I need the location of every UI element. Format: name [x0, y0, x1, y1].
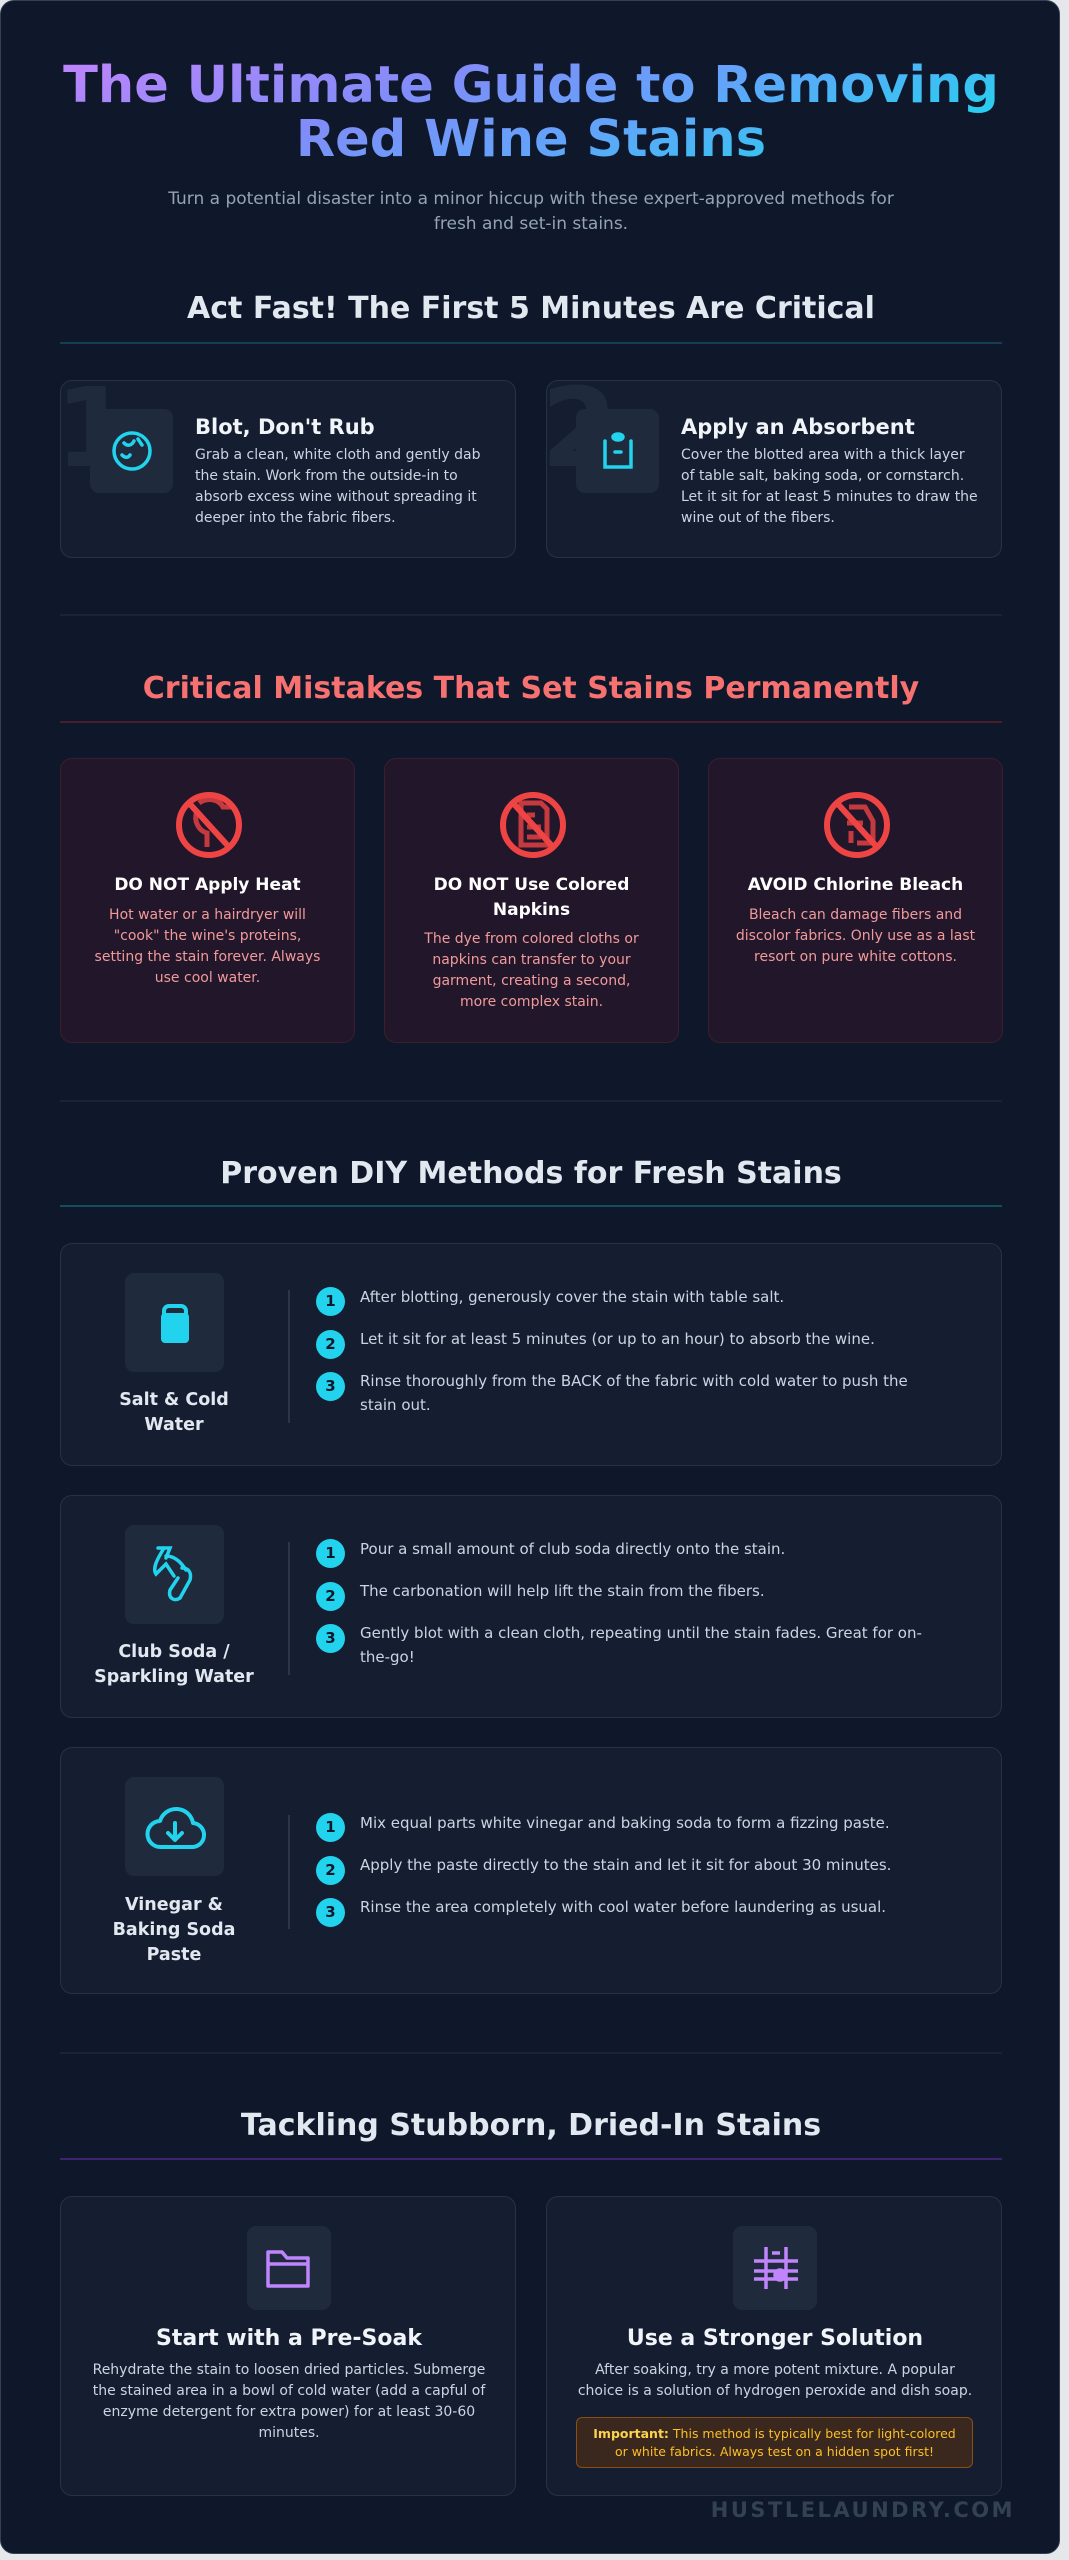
steps — [316, 1287, 908, 1414]
steps: Apply the paste directly to the stain and let it sit for about 30 minutes. — [360, 1856, 891, 1874]
heading: act fast: Act Fast! The First 5 Minutes Are Critical — [187, 291, 875, 326]
callout: important — [576, 2417, 973, 2468]
method card: vinegar — [60, 1747, 1002, 1994]
steps — [316, 1813, 891, 1927]
title: The Ultimate Guide to Removing — [63, 56, 999, 115]
heading: Start with a Pre-Soak — [156, 2326, 422, 2351]
title — [63, 56, 999, 169]
card: bleach — [708, 758, 1003, 1043]
label: Vinegar & — [125, 1895, 223, 1915]
heading: Apply an Absorbent — [681, 415, 915, 439]
steps: Rinse the area completely with cool water before laundering as usual. — [360, 1898, 886, 1916]
icon: blot — [90, 409, 173, 493]
card: blot — [60, 380, 516, 558]
heading: AVOID Chlorine Bleach — [748, 875, 963, 895]
icon: mix — [733, 2226, 817, 2310]
steps: The carbonation will help lift the stain from the fibers. — [360, 1582, 765, 1600]
label — [119, 1390, 229, 1435]
text: Bleach can damage fibers and discolor fabrics. Only use as a last resort on pure white cottons. — [736, 907, 975, 965]
label: Salt & Cold — [119, 1390, 229, 1410]
heading: stubborn: Tackling Stubborn, Dried-In Stains — [241, 2108, 821, 2143]
text: After soaking, try a more potent mixture. A popular choice is a solution of hydrogen peroxide and dish soap. — [578, 2362, 972, 2399]
steps: 3 — [325, 1377, 336, 1395]
icon: container — [576, 409, 659, 493]
steps: Rinse thoroughly from the BACK of the fabric with cold water to push the stain out. — [360, 1372, 908, 1414]
steps: 1 — [325, 1292, 336, 1310]
heading: DO NOT Use Colored Napkins — [434, 875, 629, 920]
label: Club Soda / — [118, 1642, 230, 1662]
steps: 3 — [325, 1903, 336, 1921]
callout: important: or white fabrics. Always test on a hidden spot first! — [615, 2444, 934, 2459]
card: stronger solution — [546, 2196, 1002, 2496]
label — [94, 1642, 254, 1687]
heading: Use a Stronger Solution — [627, 2326, 923, 2351]
title: Red Wine Stains — [296, 110, 766, 169]
card: pre-soak — [60, 2196, 516, 2496]
text: Grab a clean, white cloth and gently dab the stain. Work from the outside-in to absorb excess wine without spreading it deeper into the fabric fibers. — [195, 447, 480, 526]
label: Water — [144, 1415, 204, 1435]
method card: club soda — [60, 1495, 1002, 1718]
steps: 2 — [325, 1861, 336, 1879]
icon: no bleach — [824, 792, 890, 858]
method card: salt — [60, 1243, 1002, 1466]
label — [113, 1895, 235, 1965]
number 1: 1 — [55, 364, 132, 492]
card: heat — [60, 758, 355, 1043]
card: absorbent — [546, 380, 1002, 558]
steps: After blotting, generously cover the stain with table salt. — [360, 1288, 784, 1306]
steps: 3 — [325, 1629, 336, 1647]
steps: 1 — [325, 1544, 336, 1562]
heading: mistakes: Critical Mistakes That Set Stains Permanently — [143, 671, 919, 706]
label: Paste — [147, 1945, 201, 1965]
heading: DO NOT Apply Heat — [114, 875, 301, 895]
icon: folder — [247, 2226, 331, 2310]
steps: Mix equal parts white vinegar and baking soda to form a fizzing paste. — [360, 1814, 890, 1832]
icon: salt — [125, 1273, 224, 1372]
steps: Pour a small amount of club soda directly onto the stain. — [360, 1540, 785, 1558]
subtitle: Turn a potential disaster into a minor hiccup with these expert-approved methods for fresh and set-in stains. — [168, 189, 894, 234]
heading: DIY methods: Proven DIY Methods for Fresh Stains — [220, 1156, 842, 1191]
number 2: 2 — [541, 364, 618, 492]
text: The dye from colored cloths or napkins can transfer to your garment, creating a second, more complex stain. — [424, 931, 639, 1010]
icon: no napkins — [500, 792, 566, 858]
heading: Blot, Don't Rub — [195, 415, 375, 439]
text: Rehydrate the stain to loosen dried particles. Submerge the stained area in a bowl of cold water (add a capful of enzyme detergent for extra power) for at least 30-60 minutes. — [93, 2362, 485, 2441]
steps — [316, 1539, 922, 1666]
label: Sparkling Water — [94, 1667, 254, 1687]
footer brand: HUSTLELAUNDRY.COM — [711, 2498, 1015, 2522]
card: napkins — [384, 758, 679, 1043]
steps: 2 — [325, 1587, 336, 1605]
callout: important: Important: This method is typically best for light-colored — [593, 2426, 956, 2441]
steps: 2 — [325, 1335, 336, 1353]
steps: Gently blot with a clean cloth, repeating until the stain fades. Great for on-the-go! — [360, 1624, 922, 1666]
steps: Let it sit for at least 5 minutes (or up to an hour) to absorb the wine. — [360, 1330, 875, 1348]
icon: cloud download — [125, 1777, 224, 1876]
text: Hot water or a hairdryer will "cook" the wine's proteins, setting the stain forever. Always use cool water. — [95, 907, 320, 986]
icon: no heat — [176, 792, 242, 858]
steps: 1 — [325, 1818, 336, 1836]
text: Cover the blotted area with a thick layer of table salt, baking soda, or cornstarch. Let it sit for at least 5 minutes to draw the wine out of the fibers. — [681, 447, 978, 526]
label: Baking Soda — [113, 1920, 235, 1940]
icon: bubbles — [125, 1525, 224, 1624]
